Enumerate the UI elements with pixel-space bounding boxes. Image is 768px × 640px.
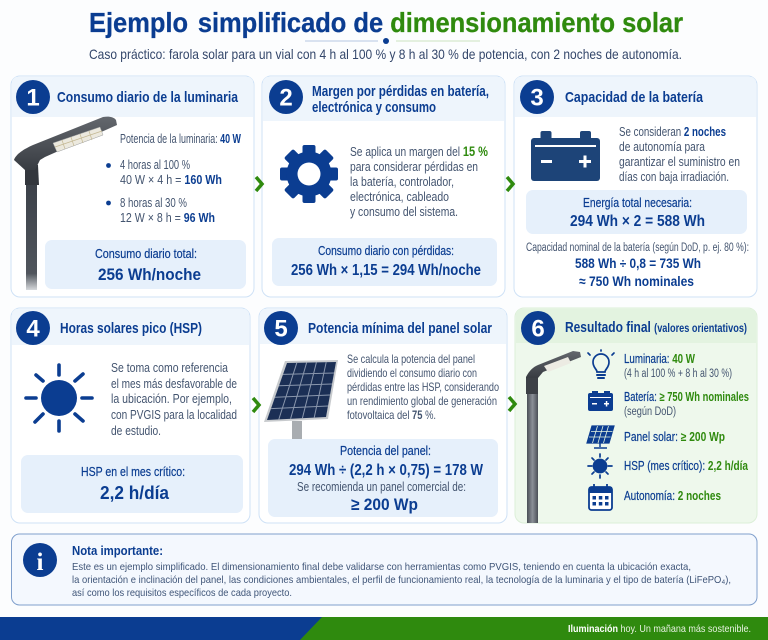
body text 2: para considerar pérdidas en xyxy=(350,160,478,174)
icon: street lamp xyxy=(14,117,117,290)
badge 4: 4 xyxy=(26,316,40,342)
note body: así como los requisitos específicos de cada proyecto. xyxy=(72,587,292,599)
result box 3 xyxy=(526,190,747,234)
panel: step 2 margen xyxy=(262,76,505,297)
result box 4: 2,2 h/día xyxy=(100,483,170,503)
badge 5: 5 xyxy=(274,316,288,342)
icon: sun small xyxy=(588,454,612,478)
body text 4: el mes más desfavorable de xyxy=(111,377,237,391)
body text 3: garantizar el suministro en xyxy=(619,155,740,169)
icon: sun xyxy=(26,365,92,431)
result box 5: ≥ 200 Wp xyxy=(351,495,418,514)
badge 3: 3 xyxy=(530,84,544,112)
badge 1 xyxy=(16,80,50,114)
icon: solar panel small xyxy=(587,426,614,448)
badge 4 xyxy=(16,311,50,345)
icon: battery small xyxy=(588,391,613,411)
body text 5: fotovoltaica del 75 %. xyxy=(347,408,436,422)
callout: nota importante xyxy=(12,534,757,605)
bullet list: 8 horas al 30 % xyxy=(120,196,187,210)
nominal capacity: ≈ 750 Wh nominales xyxy=(579,273,694,289)
bullet list: 12 W × 8 h = 96 Wh xyxy=(120,211,215,225)
badge 1: 1 xyxy=(26,84,40,112)
note body xyxy=(72,561,731,599)
badge 5 xyxy=(264,311,298,345)
body text 4 xyxy=(111,361,237,438)
heading 3: Capacidad de la batería xyxy=(565,89,704,106)
note body: Este es un ejemplo simplificado. El dimensionamiento final debe validarse con herramientas como PVGIS, teniendo en cuenta la ubicación exacta, xyxy=(72,561,691,573)
result box 2: Consumo diario con pérdidas: xyxy=(318,244,454,258)
body text 2: electrónica, cableado xyxy=(350,190,449,204)
footer band xyxy=(0,617,768,640)
body text 4: de estudio. xyxy=(111,424,161,438)
result box 4 xyxy=(21,455,243,513)
result box 1 xyxy=(45,240,246,289)
result text: panel solar: Panel solar: ≥ 200 Wp xyxy=(624,430,725,444)
nominal capacity xyxy=(526,242,749,289)
badge 6 xyxy=(521,311,555,345)
subtitle: Caso práctico: farola solar para un vial con 4 h al 100 % y 8 h al 30 % de potencia, con 2 noches de autonomía. xyxy=(89,46,682,62)
body text 3: días con baja irradiación. xyxy=(619,170,729,184)
icon: info xyxy=(23,543,57,577)
panel: step 3 batería xyxy=(514,76,757,297)
body text 5: dividiendo el consumo diario con xyxy=(347,366,477,380)
body text 4: la ubicación. Por ejemplo, xyxy=(111,392,232,406)
body text 5 xyxy=(347,352,499,422)
badge 2 xyxy=(269,80,303,114)
body text 5: Se calcula la potencia del panel xyxy=(347,352,475,366)
badge 2: 2 xyxy=(279,84,293,112)
body text 4: con PVGIS para la localidad xyxy=(111,408,237,422)
result text: HSP: HSP (mes crítico): 2,2 h/día xyxy=(624,459,749,473)
panel: step 1 consumo diario xyxy=(11,76,254,297)
result text: luminaria: (4 h al 100 % + 8 h al 30 %) xyxy=(624,368,732,380)
heading 5: Potencia mínima del panel solar xyxy=(308,320,492,337)
result text: batería xyxy=(624,390,749,418)
bullet list xyxy=(106,158,222,225)
panel: step 6 resultado final xyxy=(515,308,757,523)
result box 1: 256 Wh/noche xyxy=(98,265,201,284)
result box 5: Se recomienda un panel comercial de: xyxy=(297,480,466,494)
badge 3 xyxy=(520,80,554,114)
body text 2: y consumo del sistema. xyxy=(350,205,458,219)
result box 2: 256 Wh × 1,15 = 294 Wh/noche xyxy=(291,262,481,279)
body text 3: Se consideran 2 noches xyxy=(619,125,726,139)
arrow 2 to 3 xyxy=(507,177,513,191)
icon: bulb xyxy=(588,350,614,378)
result text: luminaria xyxy=(624,352,732,380)
heading 6: Resultado final (valores orientativos) xyxy=(565,319,747,336)
power text: Potencia de la luminaria: 40 W xyxy=(120,132,241,146)
badge 6: 6 xyxy=(531,316,545,342)
bullet list: 4 horas al 100 % xyxy=(120,158,190,172)
icon: info: i xyxy=(37,549,44,576)
heading 2: electrónica y consumo xyxy=(312,99,436,116)
result box 3: 294 Wh × 2 = 588 Wh xyxy=(570,213,705,230)
result box 5 xyxy=(268,439,498,517)
panel: step 5 panel solar xyxy=(259,308,507,523)
icon: battery xyxy=(531,131,600,181)
result text: batería: (según DoD) xyxy=(624,406,676,418)
result box 4: HSP en el mes crítico: xyxy=(81,465,185,479)
body text 2: Se aplica un margen del 15 % xyxy=(350,144,488,159)
bullet list: 40 W × 4 h = 160 Wh xyxy=(120,173,222,187)
body text 2 xyxy=(350,144,488,219)
icon: gear xyxy=(280,145,338,203)
arrow 5 to 6 xyxy=(509,397,515,411)
heading 2: Margen por pérdidas en batería, xyxy=(312,83,489,100)
body text 4: Se toma como referencia xyxy=(111,361,228,375)
note heading: Nota importante: xyxy=(72,544,163,558)
icon: solar panel xyxy=(264,360,338,439)
body text 3: de autonomía para xyxy=(619,140,705,154)
title divider xyxy=(305,38,480,44)
title: Ejemplo simplificado de dimensionamiento solar xyxy=(89,7,683,38)
arrow 1 to 2 xyxy=(256,177,262,191)
result box 3: Energía total necesaria: xyxy=(583,196,692,210)
result box 5: 294 Wh ÷ (2,2 h × 0,75) = 178 W xyxy=(289,462,483,479)
result box 1: Consumo diario total: xyxy=(95,247,197,261)
result text: autonomía: Autonomía: 2 noches xyxy=(624,489,721,503)
body text 5: pérdidas entre las HSP, considerando xyxy=(347,380,499,394)
heading 1: Consumo diario de la luminaria xyxy=(57,89,239,106)
body text 2: la batería, controlador, xyxy=(350,175,454,189)
icon: street lamp small xyxy=(526,351,581,523)
arrow 4 to 5 xyxy=(253,398,259,412)
nominal capacity: 588 Wh ÷ 0,8 = 735 Wh xyxy=(575,255,701,271)
footer slogan: Iluminación hoy. Un mañana más sostenible. xyxy=(568,623,751,635)
heading 2 xyxy=(312,83,489,116)
icon: calendar xyxy=(589,484,612,510)
body text 3 xyxy=(619,125,740,184)
result box 2 xyxy=(272,238,497,286)
body text 5: un rendimiento global de generación xyxy=(347,394,497,408)
panel: step 4 HSP xyxy=(11,308,250,523)
result text: luminaria: Luminaria: 40 W xyxy=(624,352,695,366)
result box 5: Potencia del panel: xyxy=(340,444,431,458)
heading 4: Horas solares pico (HSP) xyxy=(60,320,202,337)
